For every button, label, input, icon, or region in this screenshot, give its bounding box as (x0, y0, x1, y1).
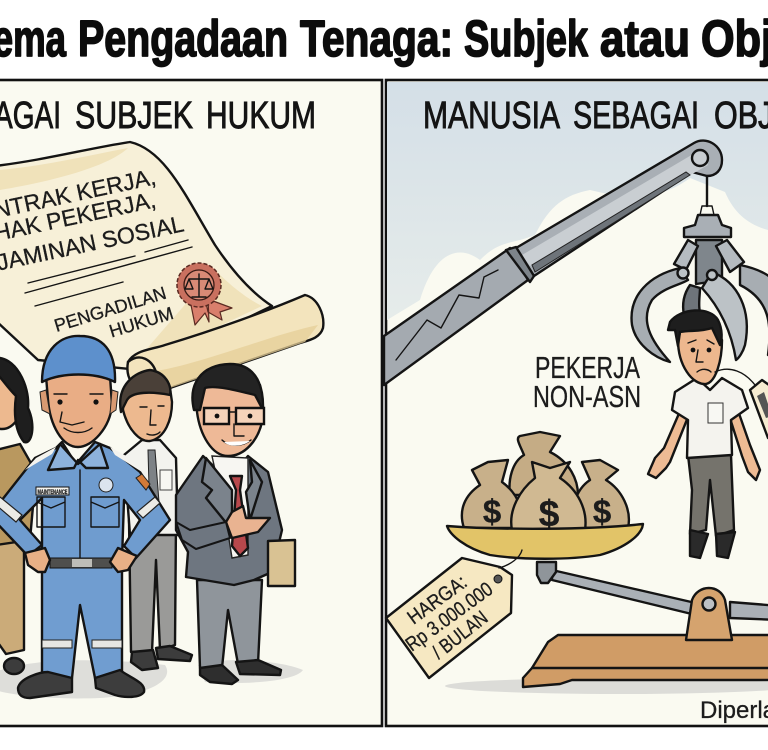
scale beam and base (445, 562, 768, 694)
money bag: center (511, 462, 586, 534)
contract scroll (0, 142, 323, 390)
panel heading left: SUBJEK (75, 95, 193, 137)
money bag: left: $ (483, 493, 501, 530)
label: non-ASN worker: NON-ASN (533, 379, 641, 414)
person: woman in tan uniform (0, 358, 36, 674)
worker name badge: MAINTENANCE (38, 489, 68, 496)
bottom border strip (0, 728, 768, 750)
money bag: left (462, 460, 522, 530)
title: Subjek (464, 10, 588, 67)
person: man in white shirt and grey tie (120, 370, 192, 670)
title: atau (600, 10, 690, 67)
price tag text: HARGA: (404, 571, 471, 629)
panel heading left (0, 95, 316, 137)
title: Pengadaan (78, 10, 288, 67)
price tag text: Rp 3.000.000 (402, 578, 497, 656)
scroll text: court of law: PENGADILAN (52, 283, 169, 336)
money bags on gold tray (447, 432, 643, 559)
icon: wax seal with scales (177, 263, 232, 325)
gold tray (447, 524, 643, 559)
panel heading right (423, 95, 768, 137)
money bag: right (573, 460, 629, 530)
label: non-ASN worker (533, 350, 641, 414)
panel heading right: MANUSIA (423, 95, 561, 137)
title: Tenaga: (300, 10, 453, 67)
price tag text: / BULAN (428, 607, 492, 664)
panel: human as object (384, 80, 768, 726)
mechanical claw (632, 215, 768, 362)
scroll text: court of law: HUKUM (107, 303, 176, 341)
person: maintenance worker in blue coverall (0, 336, 170, 698)
panel: subject of law (0, 80, 382, 726)
label: non-ASN worker: PEKERJA (535, 350, 640, 385)
figure shadows left (0, 660, 303, 698)
person: hanging worker (648, 310, 768, 558)
money bag: back (510, 432, 578, 495)
money bag: right: $ (593, 493, 611, 530)
scroll fine print lines (25, 240, 192, 306)
scroll text: contract terms (0, 163, 186, 275)
panel heading right: SEBAGAI (573, 95, 699, 137)
sky and clouds (387, 82, 768, 320)
barcode tag on worker (715, 369, 768, 450)
title (0, 10, 768, 67)
panel heading left: HUKUM (206, 95, 316, 137)
price tag (386, 550, 522, 678)
scroll text: contract terms: JAMINAN SOSIAL (0, 210, 186, 275)
crane arm (384, 141, 722, 385)
person: man in grey suit with glasses (176, 364, 295, 684)
money bag: center: $ (539, 493, 560, 534)
